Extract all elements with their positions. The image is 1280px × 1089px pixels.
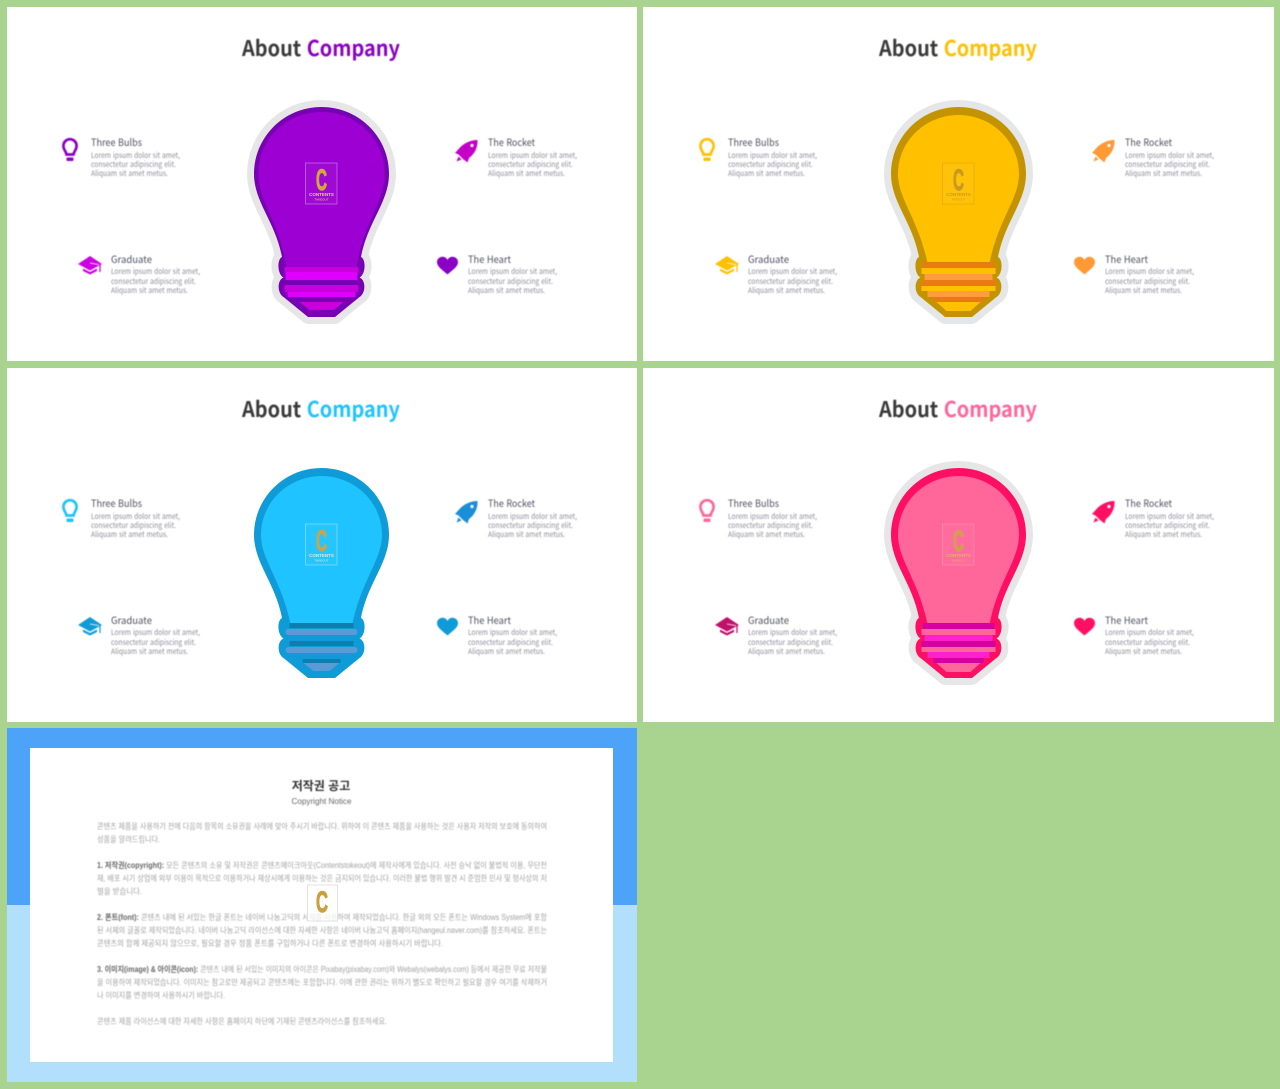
panel: blue bulb bbox=[7, 368, 637, 722]
item: three bulbs: consectetur adipiscing elit. bbox=[728, 520, 813, 531]
title: About Company bbox=[241, 393, 401, 424]
item: graduate: Lorem ipsum dolor sit amet, bbox=[111, 627, 200, 638]
item: three bulbs: Aliquam sit amet metus. bbox=[91, 168, 168, 179]
lightbulb bbox=[891, 107, 1026, 317]
copyright body text: 콘텐츠 제품을 사용하기 전에 다음의 항목의 소유권을 사례에 맞아 주시기 바랍니다. 위하여 이 콘텐츠 제품을 사용하는 것은 사용자 저작의 보호에 동의하여 bbox=[97, 821, 547, 831]
item: the heart: consectetur adipiscing elit. bbox=[1105, 637, 1190, 648]
item: three bulbs: Lorem ipsum dolor sit amet, bbox=[728, 150, 817, 161]
item: three bulbs: Three Bulbs bbox=[728, 134, 779, 149]
copyright heading bbox=[292, 778, 352, 806]
item: the heart: The Heart bbox=[468, 251, 511, 266]
logo: TAKEOUT bbox=[952, 198, 966, 202]
item: the rocket bbox=[1092, 495, 1214, 540]
item: the rocket: consectetur adipiscing elit. bbox=[1125, 520, 1210, 531]
copyright body text: 재, 배포 시기 상업에 외부 이용이 목적으로 이용하거나 재상시에게 이용하는 것은 금지되어 있습니다. 이러한 불법 행위 발견 시 준엄한 민사 및 형사상의 처 bbox=[97, 873, 547, 883]
item: the heart: consectetur adipiscing elit. bbox=[468, 276, 553, 287]
logo bbox=[942, 163, 974, 204]
copyright body text: 을 이용하여 제작되었습니다. 이미지는 참고로만 제공되고 콘텐츠에는 포함합니다. 이에 관한 권리는 위하기 별도로 확인하고 필요할 경우 여기를 삭제하거 bbox=[97, 977, 547, 987]
title: About Company bbox=[241, 32, 401, 63]
title: About Company bbox=[878, 393, 1038, 424]
item: three bulbs bbox=[63, 134, 180, 179]
copyright body text: 성품을 알려드립니다. bbox=[97, 834, 160, 844]
item: the heart: Lorem ipsum dolor sit amet, bbox=[468, 627, 557, 638]
item: three bulbs: consectetur adipiscing elit. bbox=[91, 159, 176, 170]
item: the heart: The Heart bbox=[1105, 612, 1148, 627]
lightbulb bbox=[254, 107, 389, 317]
item: graduate: consectetur adipiscing elit. bbox=[111, 276, 196, 287]
item: graduate: Lorem ipsum dolor sit amet, bbox=[111, 266, 200, 277]
item: graduate bbox=[715, 251, 837, 296]
item: graduate: Aliquam sit amet metus. bbox=[111, 285, 188, 296]
item: the heart bbox=[1074, 612, 1194, 657]
item: the heart bbox=[437, 612, 557, 657]
item: graduate bbox=[715, 612, 837, 657]
item: the rocket: The Rocket bbox=[1125, 495, 1172, 510]
item: graduate: consectetur adipiscing elit. bbox=[748, 276, 833, 287]
logo: C bbox=[316, 164, 327, 197]
logo: C bbox=[953, 525, 964, 558]
item: graduate: Lorem ipsum dolor sit amet, bbox=[748, 627, 837, 638]
logo: TAKEOUT bbox=[952, 558, 966, 562]
item: three bulbs: Lorem ipsum dolor sit amet, bbox=[91, 511, 180, 522]
item: the heart: Lorem ipsum dolor sit amet, bbox=[1105, 266, 1194, 277]
item: the heart: consectetur adipiscing elit. bbox=[468, 637, 553, 648]
lightbulb bbox=[891, 468, 1026, 678]
item: the heart: Aliquam sit amet metus. bbox=[468, 646, 545, 657]
copyright heading: 저작권 공고 bbox=[292, 778, 350, 793]
logo: C bbox=[316, 886, 328, 919]
logo: C bbox=[953, 164, 964, 197]
item: three bulbs: Three Bulbs bbox=[91, 495, 142, 510]
item: three bulbs: Three Bulbs bbox=[728, 495, 779, 510]
copyright body text: 1. 저작권(copyright): 모든 콘텐츠의 소유 및 저작권은 콘텐츠메이크아웃(Contentstokeout)에 제작사에게 있습니다. 사전 승낙 없이 불법적 이용, 무단전 bbox=[97, 860, 547, 870]
item: the rocket: Aliquam sit amet metus. bbox=[488, 529, 565, 540]
logo: TAKEOUT bbox=[315, 558, 329, 562]
copyright body text: 2. 폰트(font): 콘텐츠 내에 된 서있는 한글 폰트는 네이버 나눔고딕의 서체를 사용하여 제작되었습니다. 한글 외의 모든 폰트는 Windows System에 포함 bbox=[97, 912, 548, 922]
item: the rocket: Aliquam sit amet metus. bbox=[1125, 529, 1202, 540]
item: graduate bbox=[78, 612, 200, 657]
item: the rocket: consectetur adipiscing elit. bbox=[488, 520, 573, 531]
item: graduate: Graduate bbox=[111, 251, 152, 266]
item: the heart: Lorem ipsum dolor sit amet, bbox=[468, 266, 557, 277]
item: three bulbs: Aliquam sit amet metus. bbox=[728, 168, 805, 179]
item: the heart: Aliquam sit amet metus. bbox=[468, 285, 545, 296]
logo: TAKEOUT bbox=[315, 198, 329, 202]
item: the heart bbox=[437, 251, 557, 296]
item: three bulbs bbox=[700, 495, 817, 540]
item: the rocket: Lorem ipsum dolor sit amet, bbox=[1125, 511, 1214, 522]
logo bbox=[308, 885, 338, 921]
item: graduate: Aliquam sit amet metus. bbox=[748, 285, 825, 296]
item: three bulbs: Aliquam sit amet metus. bbox=[728, 529, 805, 540]
copyright body text: 벌을 받습니다. bbox=[97, 886, 142, 896]
item: three bulbs: consectetur adipiscing elit. bbox=[91, 520, 176, 531]
logo: CONTENTS bbox=[309, 192, 334, 197]
item: graduate: consectetur adipiscing elit. bbox=[111, 637, 196, 648]
logo bbox=[306, 163, 337, 204]
item: the rocket: The Rocket bbox=[488, 134, 535, 149]
item: the heart: Lorem ipsum dolor sit amet, bbox=[1105, 627, 1194, 638]
item: graduate bbox=[78, 251, 200, 296]
item: three bulbs bbox=[700, 134, 817, 179]
item: the rocket bbox=[455, 134, 577, 179]
item: the rocket: consectetur adipiscing elit. bbox=[488, 159, 573, 170]
copyright body text: 나 이미지를 변경하여 사용하시기 바랍니다. bbox=[97, 990, 225, 1000]
item: the rocket bbox=[455, 495, 577, 540]
item: the rocket: Aliquam sit amet metus. bbox=[488, 168, 565, 179]
copyright heading: Copyright Notice bbox=[292, 796, 352, 806]
item: the heart: The Heart bbox=[468, 612, 511, 627]
panel: yellow bulb bbox=[643, 7, 1274, 361]
logo: C bbox=[316, 525, 327, 558]
item: three bulbs: Three Bulbs bbox=[91, 134, 142, 149]
title: About Company bbox=[878, 32, 1038, 63]
item: three bulbs: Lorem ipsum dolor sit amet, bbox=[728, 511, 817, 522]
item: graduate: Graduate bbox=[748, 612, 789, 627]
item: the heart bbox=[1074, 251, 1194, 296]
panel: pink bulb bbox=[643, 368, 1274, 722]
item: the heart: consectetur adipiscing elit. bbox=[1105, 276, 1190, 287]
item: the rocket: Aliquam sit amet metus. bbox=[1125, 168, 1202, 179]
item: graduate: consectetur adipiscing elit. bbox=[748, 637, 833, 648]
panel: copyright notice bbox=[7, 728, 637, 1082]
item: three bulbs: consectetur adipiscing elit. bbox=[728, 159, 813, 170]
item: the rocket: Lorem ipsum dolor sit amet, bbox=[488, 511, 577, 522]
item: graduate: Aliquam sit amet metus. bbox=[748, 646, 825, 657]
item: the heart: Aliquam sit amet metus. bbox=[1105, 646, 1182, 657]
logo bbox=[306, 524, 337, 565]
logo: CONTENTS bbox=[946, 553, 971, 558]
item: the rocket bbox=[1092, 134, 1214, 179]
panel: purple bulb bbox=[7, 7, 637, 361]
item: the heart: Aliquam sit amet metus. bbox=[1105, 285, 1182, 296]
item: the rocket: consectetur adipiscing elit. bbox=[1125, 159, 1210, 170]
item: the rocket: Lorem ipsum dolor sit amet, bbox=[1125, 150, 1214, 161]
item: graduate: Graduate bbox=[111, 612, 152, 627]
item: the rocket: The Rocket bbox=[488, 495, 535, 510]
item: three bulbs: Lorem ipsum dolor sit amet, bbox=[91, 150, 180, 161]
logo: CONTENTS bbox=[309, 553, 334, 558]
item: graduate: Graduate bbox=[748, 251, 789, 266]
item: the heart: The Heart bbox=[1105, 251, 1148, 266]
item: the rocket: Lorem ipsum dolor sit amet, bbox=[488, 150, 577, 161]
lightbulb bbox=[254, 468, 389, 678]
item: three bulbs bbox=[63, 495, 180, 540]
item: the rocket: The Rocket bbox=[1125, 134, 1172, 149]
copyright body text: 콘텐츠의 함께 제공되지 않으므로, 필요할 경우 정품 폰트를 구입하거나 다른 폰트로 변경하여 사용하시기 바랍니다. bbox=[97, 938, 443, 948]
item: three bulbs: Aliquam sit amet metus. bbox=[91, 529, 168, 540]
copyright body text bbox=[97, 821, 548, 1026]
copyright body text: 콘텐츠 제품 라이선스에 대한 자세한 사항은 홈페이지 하단에 기재된 콘텐츠라이선스를 참조하세요. bbox=[97, 1016, 387, 1026]
logo bbox=[942, 524, 974, 565]
item: graduate: Lorem ipsum dolor sit amet, bbox=[748, 266, 837, 277]
item: graduate: Aliquam sit amet metus. bbox=[111, 646, 188, 657]
logo: CONTENTS bbox=[946, 192, 971, 197]
copyright body text: 3. 이미지(image) & 아이콘(icon): 콘텐츠 내에 된 서있는 이미지의 아이콘은 Pixabay(pixabay.com)와 Webalys(webalys.com) 등에서 제공한 무료 저작물 bbox=[97, 964, 547, 974]
copyright body text: 된 서체의 글꼴로 제작되었습니다. 네이버 나눔고딕 라이선스에 대한 자세한 사항은 네이버 나눔고딕 홈페이지(hangeul.naver.com)를 참조하세요. 폰트는 bbox=[97, 925, 547, 935]
